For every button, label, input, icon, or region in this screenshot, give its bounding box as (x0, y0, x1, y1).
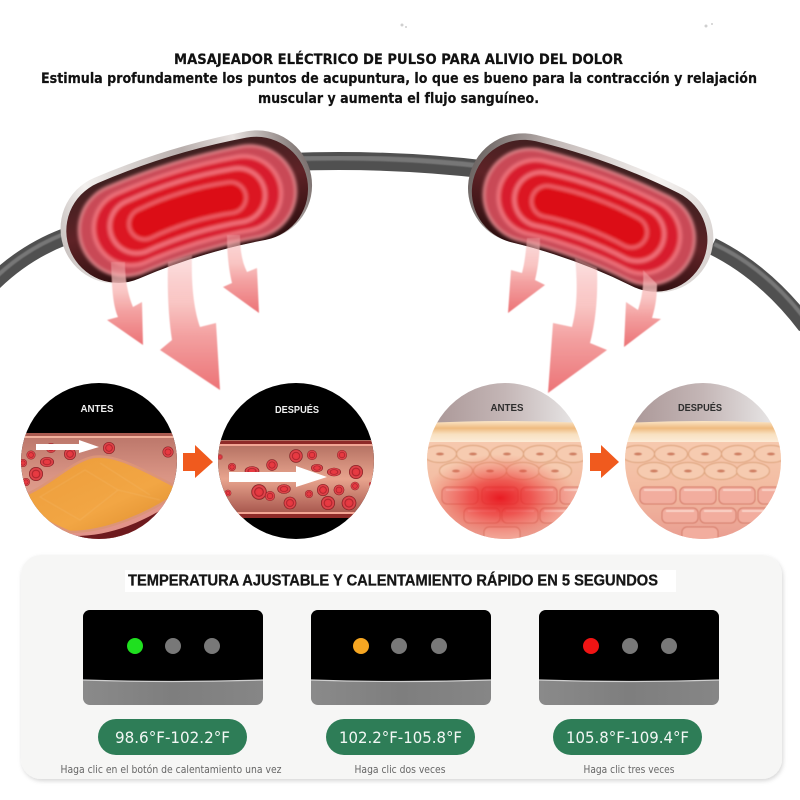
cells upper rows (622, 446, 788, 480)
red blood cells (217, 449, 373, 510)
temperature pill 1: 98.6°F-102.2°F (115, 728, 230, 747)
lower vessel wall (57, 501, 166, 539)
description line 2: muscular y aumenta el flujo sanguíneo. (258, 91, 539, 107)
arrow: left large (160, 255, 220, 390)
level 2 (311, 610, 491, 776)
control module 2 (311, 610, 491, 705)
temperature pill 3 (553, 719, 702, 755)
caption 1: Haga clic en el botón de calentamiento una vez (60, 764, 282, 776)
panel heading: TEMPERATURA AJUSTABLE Y CALENTAMIENTO RÁPIDO EN 5 SEGUNDOS (128, 572, 658, 590)
circle: muscle tissue after (625, 383, 781, 539)
heat arrows from right pad (508, 238, 661, 393)
cells upper rows (424, 446, 590, 480)
temperature pill 3: 105.8°F-109.4°F (566, 728, 689, 747)
arrow: left small (107, 262, 143, 345)
flow arrow (36, 440, 99, 453)
label: después: DESPUÉS (275, 403, 319, 416)
cells lower rows (441, 486, 579, 539)
caption 3: Haga clic tres veces (584, 764, 674, 776)
cholesterol plaque (20, 456, 180, 532)
circle: blood vessel before (19, 383, 180, 540)
arrow: before to after, blood (183, 445, 213, 478)
heat arrows from left pad (107, 235, 259, 390)
label: antes: ANTES (490, 402, 524, 414)
heading: product title and description (41, 51, 757, 107)
caption 2: Haga clic dos veces (354, 764, 446, 776)
arrow: before to after, tissue (590, 445, 619, 478)
control module 1 (83, 610, 263, 705)
red blood cells (19, 442, 174, 486)
level 1 (60, 610, 282, 776)
temperature pill 1 (98, 719, 247, 755)
panel heading highlight (125, 570, 676, 592)
neck cable (0, 158, 800, 326)
left heating pad (114, 181, 258, 232)
label: antes: ANTES (80, 403, 114, 415)
flow arrow (229, 466, 327, 487)
arrow: right left-hand (508, 238, 545, 313)
arrow: left right-hand (223, 235, 259, 313)
inflammation glow (432, 457, 572, 538)
title: MASAJEADOR ELÉCTRICO DE PULSO PARA ALIVIO DEL DOLOR (174, 51, 623, 68)
label: después: DESPUÉS (678, 401, 722, 414)
cells lower rows (639, 486, 777, 539)
temperature pill 2 (326, 719, 475, 755)
level 3 (539, 610, 719, 776)
arrow: right small (624, 270, 661, 347)
massager device (0, 158, 800, 326)
arrow: right large (548, 258, 607, 393)
temperature pill 2: 102.2°F-105.8°F (339, 728, 462, 747)
control module 3 (539, 610, 719, 705)
right heating pad (522, 185, 660, 241)
panel: adjustable temperature (21, 555, 782, 779)
circle: muscle tissue before (427, 383, 583, 539)
circle: blood vessel after (216, 383, 376, 540)
